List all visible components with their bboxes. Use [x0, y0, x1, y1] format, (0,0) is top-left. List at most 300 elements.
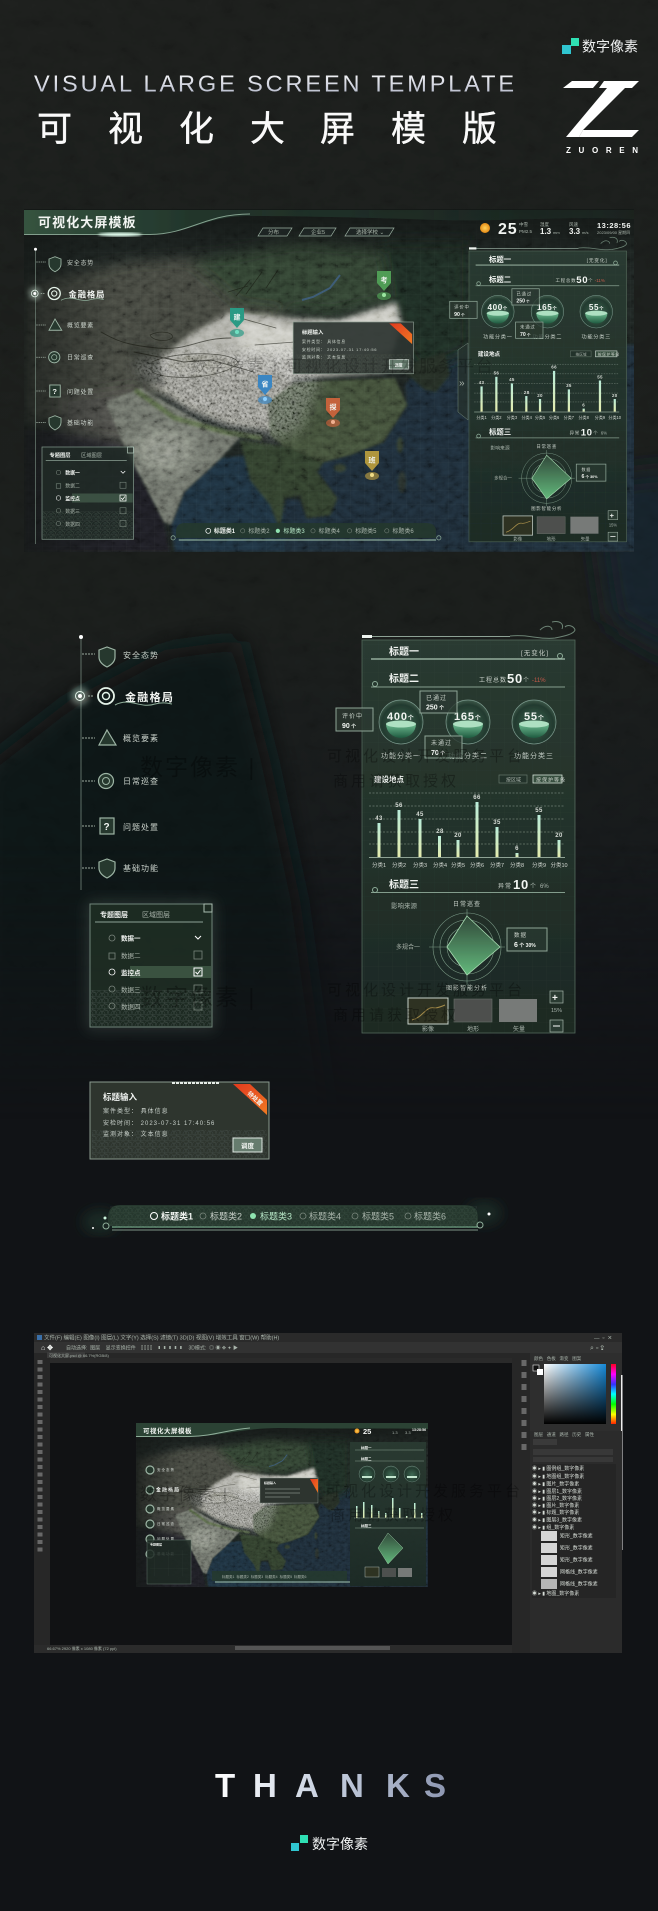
right panel large: [336, 621, 575, 1033]
gauge labels: 功能分类二: [448, 751, 488, 760]
layer panel large: 专题图层: [100, 910, 128, 919]
right panel small: 日常巡查: [536, 443, 557, 450]
button: 调度: 调度: [241, 1141, 254, 1150]
layer panel large: 监控点: [121, 968, 141, 977]
gauge: 165: 165个: [454, 711, 482, 723]
popup small: 监测对象： 文本信息: [302, 353, 346, 359]
PS dock icons: [522, 1360, 526, 1450]
bottom tab bar small: [171, 523, 441, 540]
PS ruler: [50, 1358, 512, 1363]
map style thumbnails: [408, 998, 537, 1033]
nav labels: 基础功能: [123, 863, 159, 873]
popup large: 监测对象： 文本信息: [103, 1130, 169, 1138]
gauge: 165: [446, 700, 490, 744]
gauge labels: 功能分类三: [514, 751, 554, 760]
PS layers panel: 图层 通道 路径 历史 属性: [534, 1431, 595, 1438]
PS layers panel: ◉ ▸ ▮ 图层1_数字像素: [532, 1488, 582, 1495]
bar chart: 建设地点: 45: [416, 812, 424, 818]
PS layers panel: ◉ ▸ ▮ 图片_数字像素: [532, 1502, 579, 1509]
nav labels: 问题处置: [123, 822, 159, 832]
section: 标题二: 50: [507, 671, 523, 686]
bar chart: 建设地点: 分类2: [392, 861, 406, 869]
right panel small: 400个: [487, 303, 508, 312]
dashboard thumbnail in PS: 可视化大屏模板: [143, 1426, 192, 1435]
weather and clock: 1.3: [540, 227, 552, 236]
gauge: 55: 55个: [524, 711, 545, 723]
section: 标题一: [371, 645, 565, 659]
section: 标题二: 标题二: [389, 672, 419, 685]
left navigation small: 日常巡查: [67, 354, 94, 362]
nav labels: 概览要素: [123, 733, 159, 743]
callout: 数据: [507, 928, 547, 951]
bar chart: 建设地点: 20: [555, 833, 563, 839]
right panel small: 15%: [609, 522, 617, 527]
icon: shield: [99, 647, 115, 667]
callout: 数据: 数据: [514, 931, 527, 939]
section: 标题二: 个: [523, 677, 529, 684]
popup large: 案件类型： 具体信息: [103, 1107, 169, 1115]
right panel small: 标题三: [489, 428, 511, 437]
gauge: 55: [512, 700, 556, 744]
weather and clock: mm: [553, 230, 560, 235]
dashboard thumbnail in PS: [136, 1423, 431, 1587]
dashboard thumbnail in PS: 标题一: [361, 1445, 372, 1450]
bar chart: 建设地点: 按区域: [506, 776, 521, 784]
icon: finance ring: [98, 688, 114, 704]
right panel small: 功能分类二: [533, 332, 562, 340]
left navigation small: 金融格局: [68, 289, 105, 299]
right panel small: 多规合一: [494, 475, 512, 482]
watermark text: 商用请获取授权: [333, 1007, 459, 1024]
bottom tab bar small: 标题类6: [392, 527, 414, 535]
bottom tab bar small: 标题类5: [355, 527, 377, 535]
right panel small: 个: [588, 278, 593, 283]
nav labels: [115, 650, 174, 873]
collapse tab: [458, 343, 468, 420]
PS options bar: [34, 1342, 622, 1353]
right panel small: [450, 237, 627, 542]
popup small: 安检时间： 2023-07-31 17:40:56: [302, 346, 377, 352]
bar chart: 建设地点: 55: [535, 808, 543, 814]
dashboard thumbnail in PS: 1.3: [392, 1430, 398, 1435]
right panel small: 分类6: [549, 414, 560, 420]
dashboard thumbnail in PS: 概览要素: [157, 1506, 175, 1511]
right panel small: 影像: [513, 535, 523, 542]
callout: 评价中: 评价中: [342, 712, 363, 720]
right panel small: 20: [612, 393, 618, 398]
layer panel small: 数据一: [65, 469, 80, 476]
background terrain map: [0, 0, 658, 872]
PS color picker: 颜色 色板 渐变 图案: [534, 1355, 582, 1362]
header banner: 可视化大屏模板: [38, 215, 137, 230]
zoom controls: +: [552, 993, 558, 1004]
header banner: [24, 210, 634, 236]
icon: question: ?: [104, 822, 110, 833]
bar chart: 建设地点: 分类8: [510, 861, 524, 869]
dashboard thumbnail in PS: 标题三: [361, 1523, 372, 1528]
weather and clock: [480, 221, 631, 238]
section: 标题二: 工程总数: [479, 676, 507, 684]
right panel small: 28: [524, 390, 530, 395]
nav labels: 安全态势: [123, 650, 159, 660]
right panel small: +: [610, 511, 615, 520]
nav labels: 金融格局: [125, 690, 174, 704]
bar chart: 建设地点: 分类7: [490, 861, 504, 869]
layer panel small: 数据三: [65, 508, 80, 515]
ribbon: 待处置: [233, 1084, 267, 1115]
weather and clock: m/s: [582, 230, 588, 235]
PS menu bar: — ▫ ✕: [594, 1336, 613, 1342]
bottom tab bar small: 标题类2: [248, 527, 270, 535]
layer panel small: 专题图层: [50, 451, 70, 459]
right panel small: 90 个: [454, 312, 465, 318]
bar chart: 建设地点: 分类3: [413, 861, 427, 869]
right panel small: 标题一: [489, 255, 512, 264]
right panel small: [无变化]: [587, 257, 607, 264]
PS menu bar: 文件(F) 编辑(E) 图像(I) 图层(L) 文字(Y) 选择(S) 滤镜(T) 3D(D) 视图(V) 增效工具 窗口(W) 帮助(H): [44, 1334, 279, 1342]
right panel small: 已通过: [516, 290, 532, 297]
PS layers panel: ◉ ▸ ▮ 图片_数字像素: [532, 1480, 579, 1488]
right panel small: 56: [494, 371, 499, 376]
layer panel large: 数据四: [121, 1002, 140, 1011]
right panel small: 6: [582, 402, 585, 407]
right panel small: 异常: [570, 430, 580, 437]
callout: 未通过: 70 个: [431, 750, 445, 757]
PS layers panel: 矩形_数字像素: [560, 1544, 593, 1552]
right panel small: 分类7: [564, 414, 575, 420]
radar chart: [391, 900, 505, 992]
right panel small: 分类2: [491, 414, 502, 420]
bottom tab bar small: 标题类3: [283, 527, 305, 535]
watermark in PS: [140, 1483, 523, 1524]
callout: 已通过: 250 个: [426, 704, 444, 712]
bottom tab bar large: 标题类5: [362, 1210, 394, 1222]
weather and clock: 风速: [569, 222, 578, 228]
popup small: [293, 322, 413, 374]
PS document tab: 可视化大屏.psd @ 66.7%(RGB/8): [49, 1352, 110, 1358]
left navigation small: 问题处置: [67, 388, 94, 396]
map: China terrain: [24, 209, 640, 552]
right panel small: 按保护等级: [598, 352, 620, 357]
section: 标题三: 标题三: [389, 878, 419, 891]
title: English: VISUAL LARGE SCREEN TEMPLATE: [34, 70, 514, 96]
bottom tab bar large: 标题类3: [260, 1210, 292, 1222]
collapse tab: »: [459, 378, 465, 389]
popup small: 调度: [395, 361, 403, 367]
dashboard thumbnail in PS: 标题输入: [264, 1480, 276, 1485]
top tabs: 分布: [268, 228, 280, 236]
PS layers panel: ◉ ▸ ▮ 图例组_数字像素: [532, 1465, 584, 1472]
gauge labels: 功能分类一: [381, 751, 421, 760]
PS status bar: [34, 1645, 512, 1653]
right panel small: 35: [566, 383, 572, 388]
watermark in PS: 商用请获取授权: [330, 1507, 456, 1524]
left navigation small: 概览要素: [67, 321, 94, 329]
bar chart: 建设地点: 分类4: [433, 861, 447, 869]
icon: question: [100, 818, 114, 834]
icon: base shield: [99, 859, 115, 878]
right panel small: 20: [537, 393, 543, 398]
PS status bar: 66.67% 2920 像素 x 1080 像素 (72 ppi): [47, 1645, 117, 1651]
right panel small: 矢量: [581, 535, 590, 542]
bar chart: 建设地点: 20: [454, 833, 462, 839]
right panel small: 影响来源: [490, 444, 510, 451]
callout: 已通过: 已通过: [426, 694, 447, 702]
logo: ZUOREN: [563, 81, 639, 155]
watermark text: 数字像素 |: [140, 984, 256, 1010]
callout: 数据: 6 个 30%: [514, 942, 536, 949]
right panel small: 地形: [547, 535, 556, 542]
gauge: 400: 400个: [387, 711, 415, 723]
right panel small: 50: [576, 275, 588, 286]
map pin: teal: 建: [234, 312, 240, 322]
map pin: green: 考: [380, 276, 388, 284]
right panel small: 未通过: [520, 324, 536, 331]
PS layers panel: 矩形_数字像素: [560, 1532, 593, 1540]
right panel small: 分类1: [476, 414, 487, 420]
bar chart: 建设地点: 分类1: [372, 861, 386, 869]
dashboard thumbnail in PS: 专题图层: [150, 1542, 162, 1546]
right panel small: 10: [581, 427, 593, 438]
ribbon: 待处置: 待处置: [246, 1090, 264, 1108]
PS layers panel: ◉ ▸ ▮ 地图组_数字像素: [532, 1473, 584, 1480]
section: 标题二: -11%: [532, 678, 546, 684]
left navigation small: 安全态势: [67, 259, 94, 267]
layer panel small: 区域图层: [81, 451, 102, 459]
right panel small: 6%: [601, 431, 607, 436]
PS canvas: [50, 1363, 512, 1645]
bottom tab bar large: 标题类6: [414, 1210, 446, 1222]
PS layers panel: ◉ ▸ ▮ 地图_数字像素: [532, 1590, 579, 1597]
PS layers panel: ◉ ▸ ▮ 图层3_数字像素: [532, 1516, 582, 1524]
map pin: yellow: [365, 451, 379, 480]
right panel small: 分类4: [522, 414, 533, 420]
right panel small: 66: [551, 365, 557, 370]
bar chart: 建设地点: 6: [515, 846, 519, 852]
bar chart: 建设地点: 35: [493, 820, 501, 826]
logo: 数字像素 top: 数字像素: [582, 38, 638, 54]
right panel small: 按区域: [576, 352, 587, 357]
dashboard thumbnail in PS: 问题处置: [157, 1536, 175, 1541]
popup small: 标题输入: [302, 328, 324, 336]
callout: 已通过: [420, 691, 457, 713]
left navigation small: ?: [52, 387, 57, 396]
left navigation large: [71, 635, 174, 890]
map pin: green: [377, 271, 391, 300]
nav labels: 日常巡查: [123, 776, 159, 786]
layer panel large: 数据三: [121, 985, 141, 994]
bar chart: 建设地点: 28: [436, 829, 444, 835]
right panel small: 分类3: [507, 414, 518, 420]
dashboard thumbnail in PS: 13:28:56: [412, 1428, 426, 1432]
bar chart: 建设地点: 建设地点: [374, 774, 404, 784]
layer panel small: 数据二: [65, 483, 80, 490]
map style thumbnails: 矢量: [513, 1025, 525, 1033]
right panel small: 分类10: [608, 414, 622, 420]
watermark text: 可视化设计开发服务平台: [327, 748, 525, 765]
radar chart: 日常巡查: [453, 900, 481, 908]
popup large: [90, 1082, 269, 1159]
right panel small: 6 个 30%: [581, 474, 598, 480]
section: 标题三: 6%: [540, 884, 549, 890]
weather and clock: 3.3: [569, 227, 581, 236]
gauge labels: [381, 751, 554, 760]
top tabs: 选择学校 ⌄: [356, 228, 384, 236]
right panel small: 70 个: [520, 332, 531, 338]
gauge: 400: [379, 700, 423, 744]
layer panel small: 监控点: [65, 495, 80, 502]
dashboard preview: [24, 209, 640, 552]
right panel small: 工程总数: [556, 277, 576, 284]
right panel small: 图影智能分析: [531, 505, 562, 512]
PS options bar: ⌕ ▫ ⇪: [590, 1344, 604, 1352]
button: 调度: [233, 1138, 262, 1152]
bottom tab bar large: 标题类4: [309, 1210, 341, 1222]
section: 标题三: 异常: [498, 882, 512, 890]
title: Chinese: 可视化大屏模版: [37, 110, 497, 149]
watermark in PS: 数字像素 |: [140, 1485, 229, 1504]
bar chart: 建设地点: 分类9: [532, 861, 546, 869]
callout: 未通过: 未通过: [431, 739, 452, 747]
map pin: orange: [326, 398, 340, 427]
zoom controls: [550, 991, 563, 1032]
PS options bar: 自动选择: 图层 显示变换控件 ⫿ ⫿ ⫿ ⫿ ▮ ▮ ▮ ▮ ▮ 3D模式: ◎ ◉ ✥ ✦ ▶: [66, 1344, 238, 1352]
weather and clock: 25: [498, 221, 517, 238]
callout: 评价中: 90 个: [342, 723, 356, 730]
section: 标题三: 10: [513, 877, 529, 892]
dashboard thumbnail in PS: 3.3: [405, 1430, 411, 1435]
PS layers panel: ◉ ▸ ▮ 标题_数字像素: [532, 1509, 579, 1516]
PS layers panel: 网格线_数字像素: [560, 1580, 598, 1588]
weather and clock: 2023/09/00 星期四: [597, 229, 630, 235]
weather and clock: PM2.5: [519, 229, 533, 234]
top tabs: 企业5: [311, 228, 325, 236]
watermark text: 商用请获取授权: [333, 773, 459, 790]
PS color picker: [530, 1353, 622, 1550]
PS layers panel: ◉ ▸ ▮ 图层2_数字像素: [532, 1495, 582, 1502]
section: 标题一: [无变化]: [521, 648, 549, 657]
bottom tab bar large: [82, 1201, 502, 1234]
left navigation small: [28, 248, 105, 544]
weather and clock: 湿度: [540, 221, 549, 228]
bar chart: 建设地点: [369, 774, 568, 869]
dashboard thumbnail in PS: 日常巡查: [157, 1521, 175, 1526]
right panel small: 55个: [589, 303, 604, 312]
icon: triangle: [99, 730, 116, 745]
Photoshop window: [34, 1333, 622, 1653]
bar chart: 建设地点: 56: [395, 803, 403, 809]
layer panel large: 数据一: [121, 934, 141, 942]
right panel small: 43: [479, 380, 485, 385]
THANKS heading: THANKS: [215, 1767, 446, 1804]
watermark text: [140, 748, 525, 1024]
layer panel large: 区域图层: [142, 910, 170, 919]
right panel small: 分类9: [595, 414, 606, 420]
map pin: yellow: 班: [368, 456, 376, 464]
bar chart: 建设地点: 按保护等级: [536, 776, 566, 784]
right panel small: 标题二: [489, 275, 511, 284]
dashboard thumbnail in PS: 安全态势: [157, 1467, 175, 1472]
PS layers panel: 网格线_数字像素: [560, 1568, 598, 1576]
map pin: orange: 探: [330, 402, 336, 412]
PS menu bar: [34, 1333, 622, 1342]
right panel small: 165个: [537, 303, 557, 312]
zoom controls: 15%: [551, 1008, 562, 1014]
cloud ornament: [510, 621, 575, 638]
bar chart: 建设地点: 66: [473, 795, 481, 801]
map style thumbnails: 影像: [422, 1025, 434, 1033]
map pin: teal: [230, 308, 244, 337]
popup large: 安检时间： 2023-07-31 17:40:56: [103, 1119, 215, 1127]
radar chart: 图影智能分析: [446, 984, 488, 992]
weather and clock: 中雪: [519, 221, 528, 228]
popup small: 案件类型： 具体信息: [302, 338, 346, 344]
right panel small: 55: [597, 374, 603, 379]
logo: 数字像素 bottom: [291, 1835, 368, 1852]
section: 标题三: 个: [530, 883, 536, 890]
logo: 数字像素 bottom: 数字像素: [312, 1836, 368, 1852]
logo: ZUOREN: ZUOREN: [566, 146, 638, 155]
map style thumbnails: 地形: [467, 1025, 479, 1033]
bar chart: 建设地点: 分类10: [550, 861, 568, 869]
bar chart: 建设地点: 43: [375, 816, 383, 822]
right panel small: 评价中: [454, 304, 470, 311]
radar chart: 影响来源: [391, 901, 418, 910]
dashboard thumbnail in PS: 标题二: [361, 1456, 372, 1461]
right panel small: 数据: [581, 466, 591, 472]
right panel small: 分类5: [535, 414, 546, 420]
top tabs: [258, 228, 394, 236]
right panel small: 250 个: [516, 298, 530, 304]
bar chart: 建设地点: 分类5: [451, 861, 465, 869]
watermark text: 可视化设计开发服务平台: [327, 982, 525, 999]
right panel small: 分类8: [578, 414, 590, 420]
map pin: blue: [258, 375, 272, 404]
dashboard thumbnail in PS: 金融格局: [156, 1486, 180, 1494]
bottom tab bar large: 标题类2: [210, 1210, 242, 1222]
right panel small: 45: [509, 377, 515, 382]
PS layers panel: 矩形_数字像素: [560, 1556, 593, 1564]
radar chart: 多规合一: [396, 943, 420, 951]
right panel small: 建设地点: [478, 350, 501, 358]
dashboard thumbnail in PS: 25: [363, 1427, 371, 1436]
layer panel large: [86, 900, 216, 1031]
section: 标题二: [371, 671, 565, 687]
left navigation small: 基础功能: [67, 419, 94, 427]
PS layers panel: ◉ ▸ ▮ 组_数字像素: [532, 1524, 574, 1531]
weather and clock: 13:28:56: [597, 221, 631, 230]
watermark over dashboard: 数字像素 | 可视化设计开发服务平台: [190, 357, 495, 376]
right panel small: 个: [593, 431, 598, 436]
bottom tab bar large: 标题类1: [161, 1210, 193, 1222]
dashboard thumbnail in PS: 标题类1 标题类2 标题类3 标题类4 标题类5 标题类6: [222, 1574, 306, 1579]
bottom tab bar small: 标题类1: [214, 527, 236, 535]
PS options bar: ⌂ ✥: [41, 1344, 53, 1352]
map pin: blue: 省: [262, 380, 268, 388]
layer panel small: 数据四: [65, 521, 80, 528]
right panel small: 功能分类三: [581, 332, 611, 340]
callout: 评价中: [336, 708, 373, 731]
popup large: 标题输入: [103, 1092, 138, 1102]
layer panel small: [42, 447, 134, 539]
bar chart: 建设地点: 分类6: [470, 861, 484, 869]
watermark in PS: 可视化设计开发服务平台: [325, 1483, 523, 1500]
callout: 未通过: [425, 736, 462, 758]
right panel small: -11%: [595, 278, 605, 283]
section: 标题三: [371, 877, 565, 892]
icon: patrol: [98, 774, 114, 788]
PS tool strip: [38, 1360, 42, 1555]
